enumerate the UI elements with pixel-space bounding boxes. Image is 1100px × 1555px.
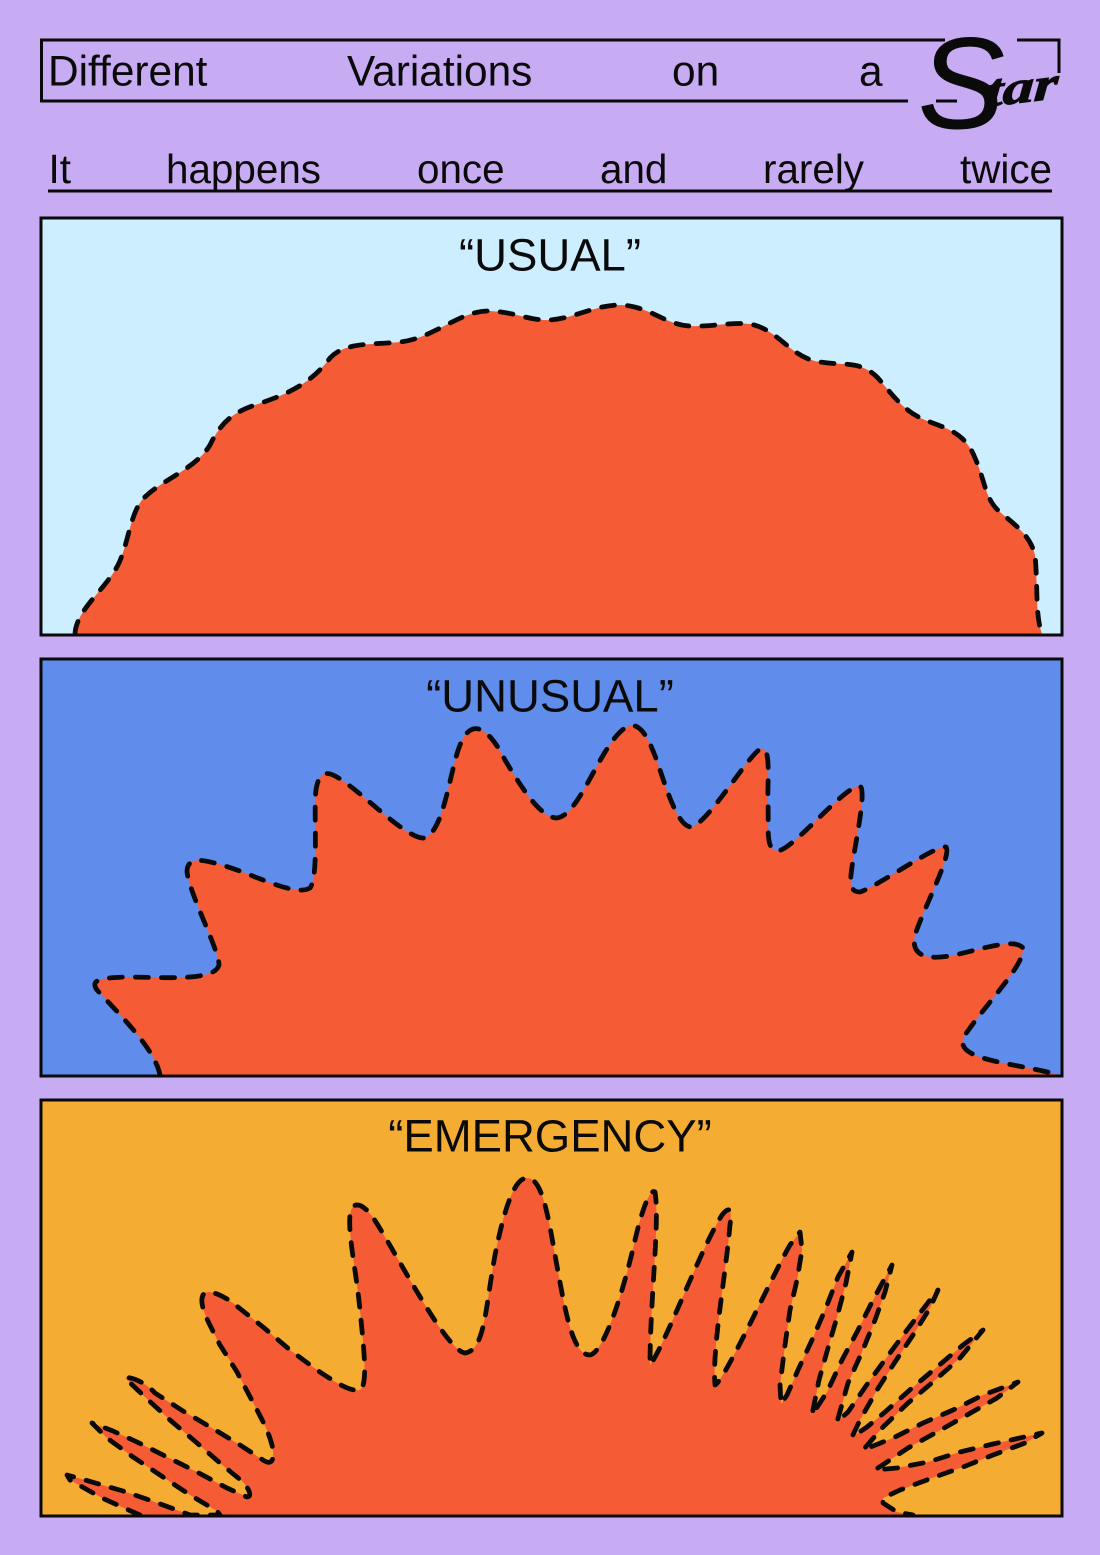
heading: usual: “USUAL” <box>459 230 641 280</box>
title: different variations on a star: Variations <box>347 48 532 94</box>
title: different variations on a star: a <box>859 48 883 94</box>
sun: emergency, long thin spikes <box>67 1178 1042 1515</box>
subtitle: it happens once and rarely twice: and <box>600 146 667 192</box>
subtitle: it happens once and rarely twice: once <box>417 146 505 192</box>
subtitle: it happens once and rarely twice: happens <box>166 146 321 192</box>
heading: emergency: “EMERGENCY” <box>388 1110 712 1162</box>
subtitle: it happens once and rarely twice <box>48 146 1052 192</box>
sun: unusual, pointed waves <box>95 726 1060 1075</box>
heading: unusual: “UNUSUAL” <box>426 670 674 722</box>
logo: Star wordmark <box>918 10 1060 156</box>
logo: Star wordmark: S <box>918 10 1005 156</box>
logo: Star wordmark: tar <box>984 57 1060 117</box>
title: different variations on a star: Different <box>48 48 208 94</box>
subtitle: it happens once and rarely twice: rarely <box>763 146 865 192</box>
subtitle: it happens once and rarely twice: It <box>48 146 71 192</box>
subtitle: it happens once and rarely twice: twice <box>960 146 1052 192</box>
panel: unusual <box>41 659 1062 1076</box>
title: different variations on a star: on <box>672 48 719 94</box>
panel: usual <box>41 218 1062 635</box>
sun: usual, gently wavy <box>75 305 1042 634</box>
panel: emergency <box>41 1100 1062 1516</box>
title: different variations on a star <box>42 10 1060 156</box>
